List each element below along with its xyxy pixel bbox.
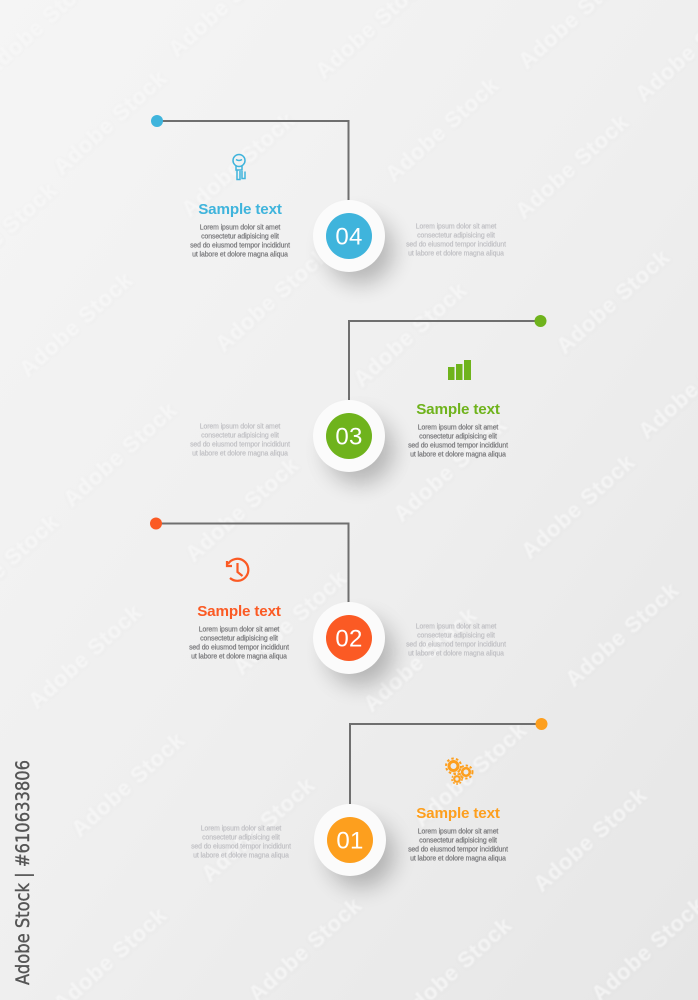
faded text 02: sed do eiusmod tempor incididunt xyxy=(406,642,506,648)
watermarks: Adobe Stock xyxy=(66,727,190,842)
dot 03 xyxy=(534,315,546,327)
icon: bar chart xyxy=(448,360,471,380)
watermarks: Adobe Stock xyxy=(560,577,684,692)
faded text 03 xyxy=(190,424,290,458)
body text 02: ut labore et dolore magna aliqua xyxy=(191,654,287,660)
body text 01 xyxy=(408,828,508,862)
heading 04: Sample text xyxy=(198,201,282,218)
connector line 04 xyxy=(157,121,348,202)
stock id vertical label: Adobe Stock | #610633806 xyxy=(12,760,34,985)
number badge 03 xyxy=(313,400,394,484)
step 03 xyxy=(190,315,546,484)
faded text 01: consectetur adipisicing elit xyxy=(202,834,280,842)
faded text 04: Lorem ipsum dolor sit amet xyxy=(416,224,496,230)
faded text 03: ut labore et dolore magna aliqua xyxy=(192,450,288,458)
watermarks: Adobe Stock xyxy=(196,772,320,887)
body text 02 xyxy=(189,626,289,660)
icon: light bulb xyxy=(233,154,245,180)
faded text 01: Lorem ipsum dolor sit amet xyxy=(201,826,281,832)
faded text 04: consectetur adipisicing elit xyxy=(417,232,495,240)
watermarks: Adobe Stock xyxy=(516,449,640,564)
watermarks: Adobe Stock xyxy=(348,277,472,392)
watermarks: Adobe Stock xyxy=(14,267,138,382)
number badge 03: 03 xyxy=(335,424,363,450)
faded text 02: consectetur adipisicing elit xyxy=(417,632,495,640)
watermarks: Adobe Stock xyxy=(510,109,634,224)
connector line 02 xyxy=(156,524,348,604)
body text 01: consectetur adipisicing elit xyxy=(419,838,497,844)
heading 02: Sample text xyxy=(197,603,281,620)
watermarks: Adobe Stock xyxy=(358,602,482,717)
dot 04 xyxy=(151,115,163,127)
heading 03: Sample text xyxy=(416,401,500,418)
faded text 03: consectetur adipisicing elit xyxy=(201,432,279,440)
body text 03: consectetur adipisicing elit xyxy=(419,434,497,440)
body text 01: sed do eiusmod tempor incididunt xyxy=(408,846,508,854)
number badge 01: 01 xyxy=(336,828,364,854)
watermarks: Adobe Stock xyxy=(551,244,675,359)
body text 03: sed do eiusmod tempor incididunt xyxy=(408,442,508,450)
faded text 01 xyxy=(191,826,291,860)
faded text 04 xyxy=(406,224,506,258)
body text 04: Lorem ipsum dolor sit amet xyxy=(200,224,280,232)
body text 03: Lorem ipsum dolor sit amet xyxy=(418,424,498,432)
connector line 01 xyxy=(350,724,541,806)
body text 04 xyxy=(190,224,290,258)
heading 01: Sample text xyxy=(416,805,500,822)
body text 03: ut labore et dolore magna aliqua xyxy=(410,452,506,458)
body text 03 xyxy=(408,424,508,458)
faded text 03: sed do eiusmod tempor incididunt xyxy=(190,442,290,448)
watermarks: Adobe Stock xyxy=(408,717,532,832)
step 01 xyxy=(191,718,548,888)
faded text 02 xyxy=(406,624,506,658)
faded text 02: Lorem ipsum dolor sit amet xyxy=(416,624,496,630)
watermarks: Adobe Stock xyxy=(58,397,182,512)
watermarks: Adobe Stock xyxy=(210,242,334,357)
step 04 xyxy=(151,115,506,284)
faded text 01: sed do eiusmod tempor incididunt xyxy=(191,844,291,850)
watermarks: Adobe Stock xyxy=(528,782,652,897)
watermarks: Adobe Stock xyxy=(48,65,172,180)
watermarks: Adobe Stock xyxy=(228,565,352,680)
faded text 04: ut labore et dolore magna aliqua xyxy=(408,250,504,258)
step 02 xyxy=(150,518,506,686)
number badge 02 xyxy=(313,602,394,686)
dot 02 xyxy=(150,518,162,530)
icon: gears xyxy=(446,758,472,784)
number badge 04 xyxy=(313,200,394,284)
body text 04: consectetur adipisicing elit xyxy=(201,234,279,240)
faded text 02: ut labore et dolore magna aliqua xyxy=(408,650,504,658)
number badge 02: 02 xyxy=(335,626,363,652)
number badge 04: 04 xyxy=(335,224,363,250)
icon: clock xyxy=(227,559,248,581)
body text 01: ut labore et dolore magna aliqua xyxy=(410,856,506,862)
watermarks: Adobe Stock xyxy=(380,72,504,187)
connector line 03 xyxy=(349,321,540,402)
body text 01: Lorem ipsum dolor sit amet xyxy=(418,828,498,836)
watermarks: Adobe Stock xyxy=(388,412,512,527)
watermarks: Adobe Stock xyxy=(23,599,147,714)
watermarks: Adobe Stock xyxy=(180,452,304,567)
body text 02: sed do eiusmod tempor incididunt xyxy=(189,644,289,652)
dot 01 xyxy=(536,718,548,730)
body text 04: ut labore et dolore magna aliqua xyxy=(192,252,288,258)
watermarks: Adobe Stock xyxy=(176,107,300,222)
faded text 01: ut labore et dolore magna aliqua xyxy=(193,852,289,860)
body text 02: consectetur adipisicing elit xyxy=(200,636,278,642)
faded text 03: Lorem ipsum dolor sit amet xyxy=(200,424,280,430)
faded text 04: sed do eiusmod tempor incididunt xyxy=(406,242,506,248)
number badge 01 xyxy=(314,804,395,888)
body text 02: Lorem ipsum dolor sit amet xyxy=(199,626,279,634)
body text 04: sed do eiusmod tempor incididunt xyxy=(190,242,290,250)
